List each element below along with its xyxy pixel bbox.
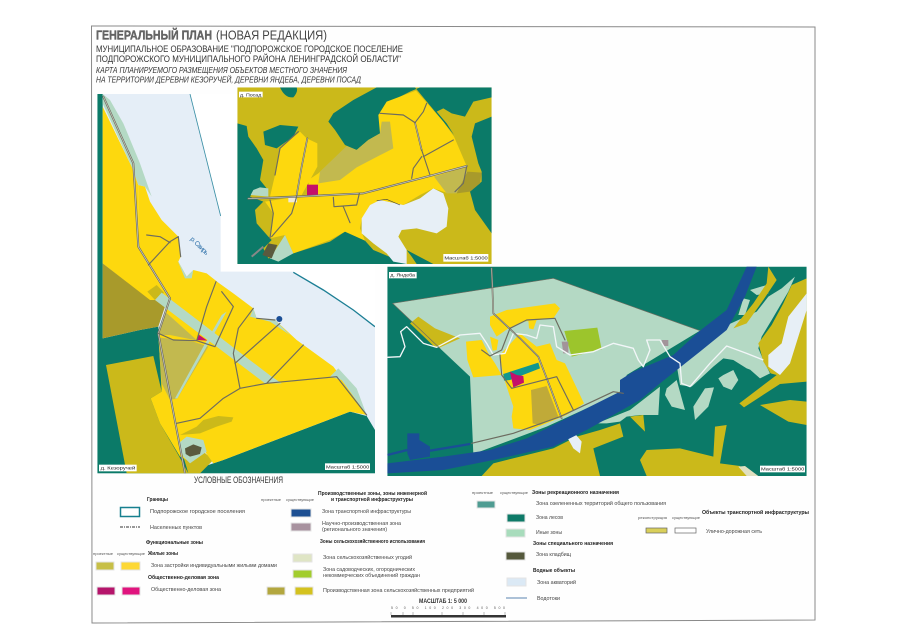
legend group: agricultural zones: некоммерческих объединений граждан xyxy=(323,572,420,579)
scale bar: 50 0 50 100 200 300 400 500 xyxy=(391,606,505,610)
legend group: special zones: Зоны специального назначения xyxy=(533,541,613,547)
label: Kezoruchey xyxy=(99,465,137,472)
legend group: industrial and transport zones xyxy=(261,490,427,533)
map: Yandeba village xyxy=(387,267,807,476)
legend group: residential zones: Жилые зоны xyxy=(147,551,178,557)
legend group: water objects xyxy=(506,567,576,602)
gardening zone xyxy=(564,328,602,357)
scale label: Масштаб 1:5000 xyxy=(761,467,805,473)
cemetery xyxy=(262,243,277,258)
subtitle: map description: КАРТА ПЛАНИРУЕМОГО РАЗМЕЩЕНИЯ ОБЪЕКТОВ МЕСТНОГО ЗНАЧЕНИЯ xyxy=(96,66,347,75)
scale label: Масштаб 1:5000 xyxy=(326,465,370,471)
legend group: water objects: Водные объекты xyxy=(533,567,575,574)
olive patch xyxy=(180,416,233,435)
legend group: public business zone xyxy=(97,574,221,595)
legend group: recreation zones: проектные xyxy=(472,491,493,495)
legend group: boundaries: Подпорожское городское поселения xyxy=(150,509,245,515)
label: Yandeba: д. Яндеба xyxy=(390,273,415,279)
title block xyxy=(96,28,403,84)
agricultural enterprise zone xyxy=(106,356,213,473)
water xyxy=(565,293,807,453)
public business zone xyxy=(510,372,524,387)
legend group: agricultural zones: Производственная зона сельскохозяйственных предприятий xyxy=(323,587,474,594)
scale label xyxy=(443,254,488,262)
projected zone xyxy=(531,386,558,425)
legend group: agricultural zones: Зоны сельскохозяйственного использования xyxy=(320,538,425,545)
subtitle: map description xyxy=(96,66,361,84)
legend group: residential zones: Функциональные зоны xyxy=(146,540,203,546)
label: Posad: д. Посад xyxy=(240,92,261,98)
subtitle: municipality: ПОДПОРОЖСКОГО МУНИЦИПАЛЬНОГО РАЙОНА ЛЕНИНГРАДСКОЙ ОБЛАСТИ" xyxy=(96,53,401,65)
residential zones xyxy=(270,132,317,197)
subtitle: municipality: МУНИЦИПАЛЬНОЕ ОБРАЗОВАНИЕ "ПОДПОРОЖСКОЕ ГОРОДСКОЕ ПОСЕЛЕНИЕ xyxy=(96,44,403,55)
legend group: transport objects: существующие xyxy=(672,516,700,520)
legend heading: УСЛОВНЫЕ ОБОЗНАЧЕНИЯ xyxy=(194,475,283,485)
legend group: industrial and transport zones: (регионального значения) xyxy=(322,527,387,533)
legend group: transport objects: Улично-дорожная сеть xyxy=(706,529,762,535)
residential zones xyxy=(466,303,584,430)
public business zone xyxy=(197,334,207,341)
heading: general plan: (НОВАЯ РЕДАКЦИЯ) xyxy=(216,28,327,42)
legend group: residential zones: Зона застройки индивидуальными жилыми домами xyxy=(151,562,277,569)
subtitle: map description: НА ТЕРРИТОРИИ ДЕРЕВНИ КЕЗОРУЧЕЙ, ДЕРЕВНИ ЯНДЕБА, ДЕРЕВНИ ПОСАД xyxy=(96,76,361,84)
legend group: industrial and transport zones: проектные xyxy=(261,498,281,502)
legend group: transport objects: реконструкция xyxy=(638,516,667,520)
river label: р. Свирь xyxy=(189,236,210,257)
light green zones xyxy=(155,293,282,398)
legend group: public business zone: Общественно-деловая зона xyxy=(148,574,220,581)
legend group: boundaries: Населенных пунктов xyxy=(150,525,202,531)
subtitle: municipality xyxy=(96,44,403,65)
legend group: industrial and transport zones: Производственные зоны, зоны инженерной xyxy=(318,490,427,497)
label: Kezoruchey: д. Кезоручей xyxy=(101,465,136,472)
scale label: Масштаб 1:5000 xyxy=(444,256,488,262)
projected low-rise zones xyxy=(103,263,165,338)
roads xyxy=(248,103,467,257)
scale label xyxy=(325,463,370,471)
scale bar: МАСШТАБ 1: 5 000 xyxy=(419,599,468,605)
transport object xyxy=(276,316,282,322)
recreation zone xyxy=(503,363,540,381)
public business zone xyxy=(307,185,318,195)
legend group: industrial and transport zones: Зона транспортной инфраструктуры xyxy=(322,508,411,515)
heading: general plan xyxy=(96,28,327,42)
forest zones xyxy=(237,87,492,264)
sheet frame xyxy=(92,26,815,623)
legend group: water objects: Водотоки xyxy=(537,596,560,602)
legend group: industrial and transport zones: и транспортной инфраструктуры xyxy=(331,496,413,503)
legend group: industrial and transport zones: существующие xyxy=(286,498,314,502)
legend group: residential zones: проектные xyxy=(93,552,113,556)
lake xyxy=(362,188,448,264)
heading: general plan: ГЕНЕРАЛЬНЫЙ ПЛАН xyxy=(96,28,212,42)
cemetery xyxy=(185,444,202,457)
legend group: agricultural zones: Зона садоводческих, огороднических xyxy=(323,567,415,573)
map: Posad village xyxy=(237,87,492,264)
legend group: boundaries xyxy=(120,497,245,531)
legend group: recreation zones: Зона озелененных территорий общего пользования xyxy=(536,500,666,507)
legend group: residential zones: существующие xyxy=(117,552,145,556)
legend group: agricultural zones xyxy=(267,538,474,595)
roads xyxy=(393,268,700,443)
scale bar xyxy=(391,599,506,618)
legend group: transport objects: Объекты транспортной инфраструктуры xyxy=(702,509,809,516)
legend group: recreation zones: существующие xyxy=(500,491,528,495)
legend group: transport objects xyxy=(638,509,809,535)
map: Kezoruchey village xyxy=(97,94,375,473)
legend group: industrial and transport zones: Научно-производственная зона xyxy=(322,521,401,527)
river xyxy=(387,325,763,387)
legend group: special zones: Зона кладбищ xyxy=(536,552,572,558)
legend group: recreation zones: Иные зоны xyxy=(536,530,562,536)
agricultural zones: olive xyxy=(410,267,807,476)
river Svir water xyxy=(97,94,375,473)
legend group: water objects: Зона акваторий xyxy=(537,579,576,586)
light green zones xyxy=(251,187,293,262)
legend group: public business zone: Общественно-деловая зона xyxy=(151,587,221,593)
legend group: agricultural zones: Зона сельскохозяйственных угодий xyxy=(323,554,412,561)
residential zones xyxy=(103,107,170,307)
legend group: special zones xyxy=(506,541,613,560)
roads xyxy=(103,97,367,473)
forest zones xyxy=(97,94,375,473)
other zones: light green xyxy=(393,278,700,454)
transport zone band xyxy=(387,267,757,473)
legend group: recreation zones: Зоны рекреационного назначения xyxy=(532,490,619,496)
legend group: residential zones xyxy=(93,540,277,570)
legend group: recreation zones xyxy=(472,490,666,537)
projected residential zones xyxy=(318,122,467,193)
legend xyxy=(93,475,809,618)
legend group: recreation zones: Зона лесов xyxy=(536,515,563,521)
legend group: boundaries: Границы xyxy=(147,497,168,503)
